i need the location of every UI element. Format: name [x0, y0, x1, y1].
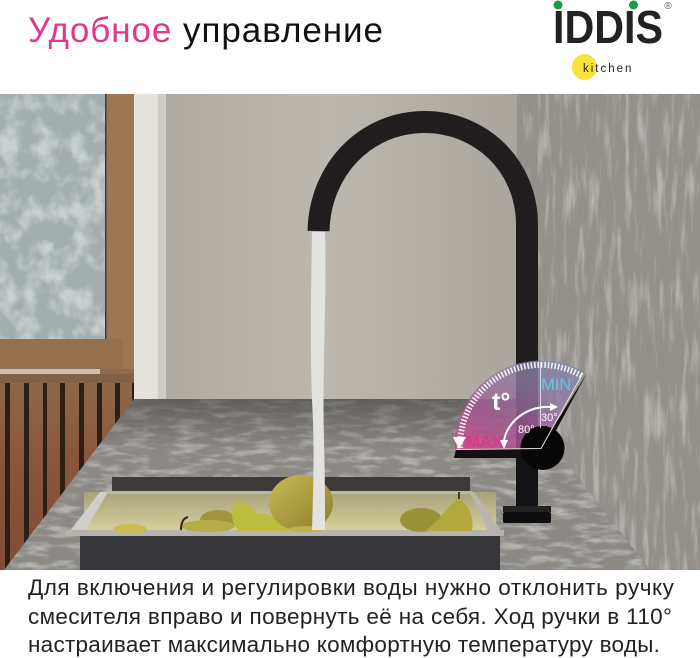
caption	[28, 575, 674, 657]
sector edges	[456, 373, 583, 450]
water stream	[311, 232, 325, 530]
logo: IDDIS kitchen	[553, 0, 672, 80]
knob	[520, 426, 564, 470]
logo: IDDIS kitchen: IDDIS	[553, 1, 663, 53]
title: Удобное управление	[28, 11, 384, 50]
logo: IDDIS kitchen: ®	[664, 1, 672, 12]
basket with pears	[66, 475, 504, 570]
logo: IDDIS kitchen: kitchen	[583, 63, 633, 75]
degree label: t°	[492, 388, 510, 416]
sink back edge	[112, 477, 470, 491]
motion arrow	[504, 407, 551, 441]
wooden slats	[0, 383, 134, 573]
window view	[0, 94, 105, 339]
30 degrees label: 30°	[541, 412, 558, 424]
80 degrees label: 80°	[518, 424, 535, 436]
caption: Для включения и регулировки воды нужно отклонить ручку	[28, 575, 674, 600]
wall	[166, 94, 517, 399]
caption: настраивает максимально комфортную температуру воды.	[28, 632, 660, 657]
scale ticks	[460, 365, 582, 448]
max marker	[453, 437, 466, 449]
handle plate	[454, 373, 587, 458]
stone side wall	[517, 94, 700, 570]
MAX label: MAX	[466, 432, 503, 451]
caption: смесителя вправо и повернуть её на себя. Ход ручки в 110°	[28, 604, 672, 628]
faucet	[318, 122, 551, 523]
photo: kitchen sink with faucet	[0, 94, 700, 570]
window frame	[0, 94, 134, 384]
MIN label: MIN	[541, 376, 571, 394]
dial sector	[455, 360, 584, 449]
countertop	[0, 399, 660, 570]
temperature dial	[453, 360, 587, 470]
